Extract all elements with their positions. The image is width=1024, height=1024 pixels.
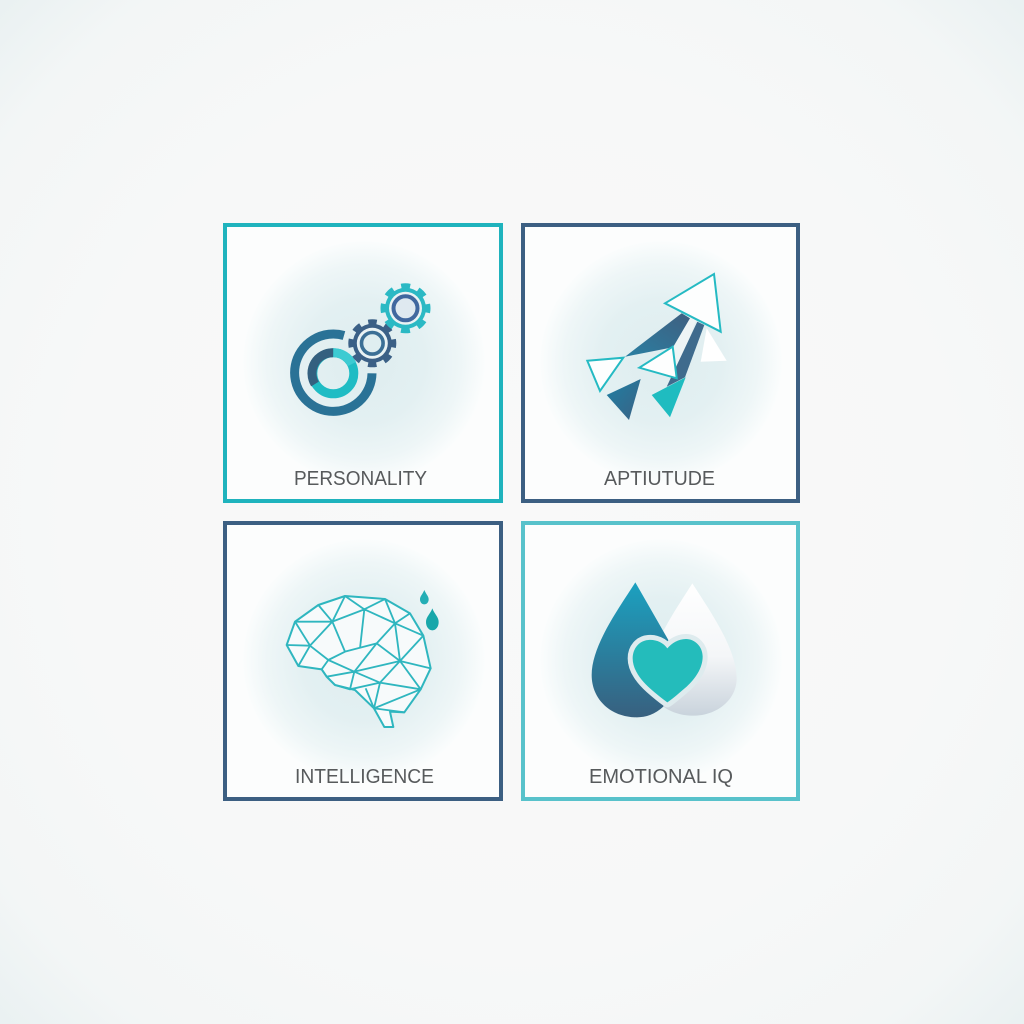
icon: navy gear bbox=[351, 322, 394, 365]
icon: polygon brain bbox=[287, 590, 439, 727]
icon: drops and heart bbox=[592, 582, 737, 717]
icon: heart bbox=[633, 639, 703, 702]
label: intelligence: INTELLIGENCE bbox=[295, 766, 434, 788]
panel: aptitude bbox=[523, 225, 798, 501]
label: aptitude: APTIUTUDE bbox=[604, 468, 715, 490]
icon: large drop bbox=[426, 608, 439, 630]
icon: rings and gears bbox=[295, 286, 428, 411]
label: personality: PERSONALITY bbox=[294, 468, 427, 490]
icon: teal gear bbox=[383, 286, 428, 331]
panel: personality bbox=[225, 225, 501, 501]
label: emotional iq: EMOTIONAL IQ bbox=[589, 766, 733, 788]
icon: small drop bbox=[420, 590, 429, 604]
panel: intelligence bbox=[225, 523, 501, 799]
icon: arrows and triangles bbox=[587, 274, 727, 420]
panel: emotional iq bbox=[523, 523, 798, 799]
